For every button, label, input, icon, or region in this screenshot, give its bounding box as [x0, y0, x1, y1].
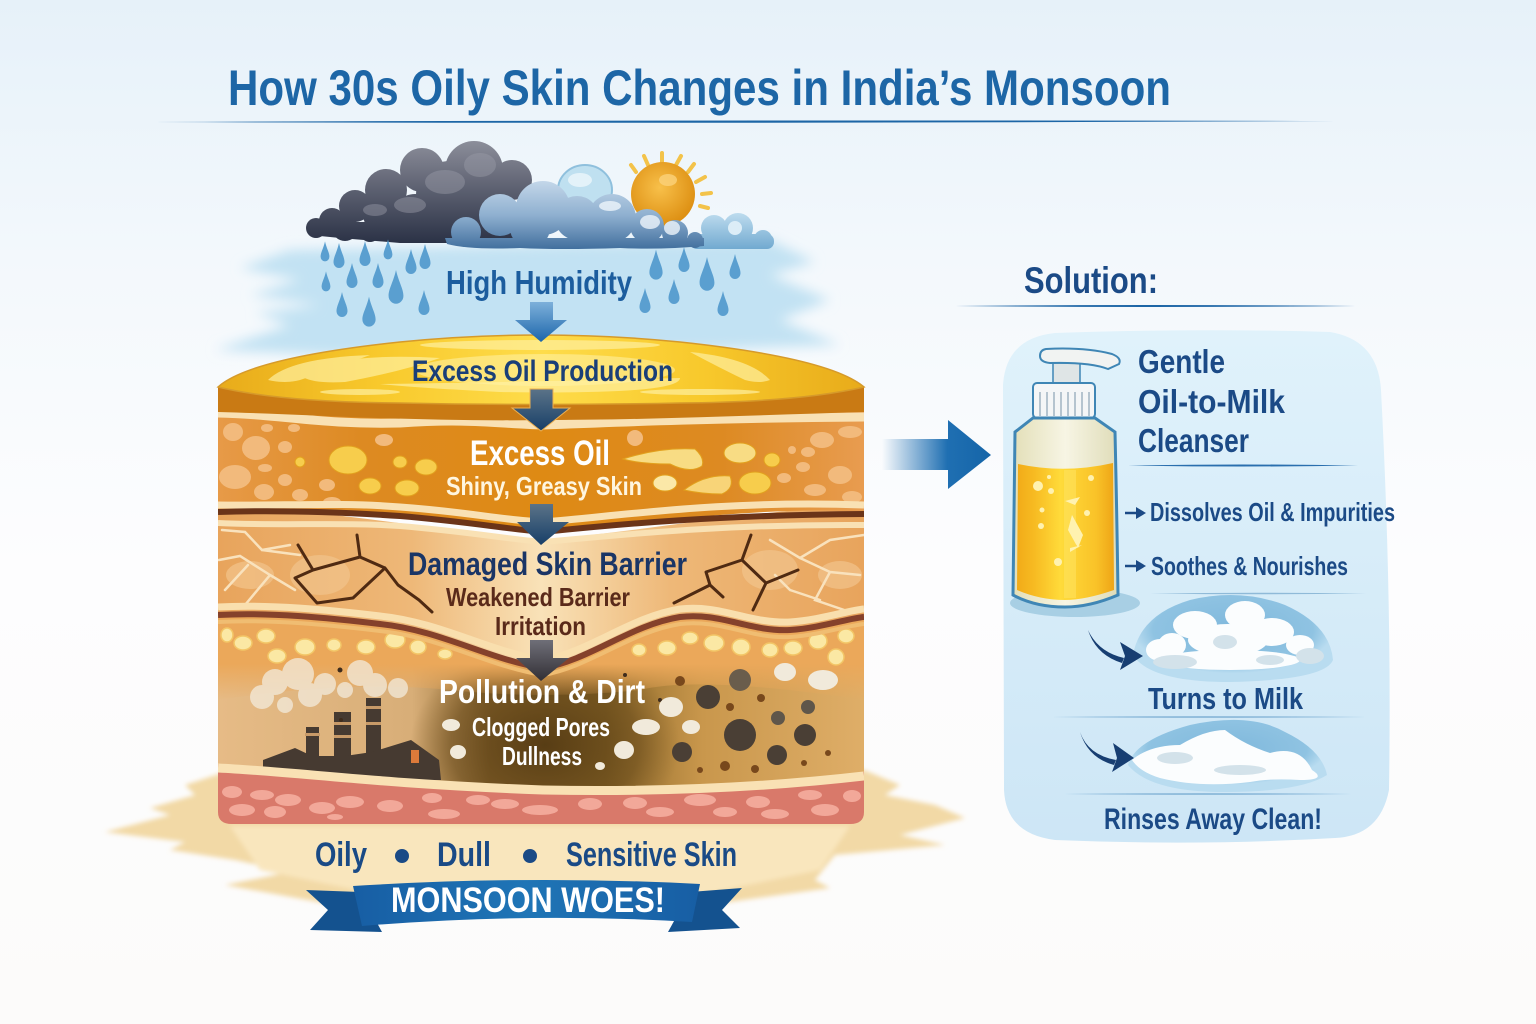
icon: smoke — [250, 658, 408, 713]
skin separators — [218, 413, 864, 790]
icon: sun — [631, 153, 711, 226]
skin layer: base pink — [218, 764, 864, 830]
icon: rain drops — [321, 239, 740, 327]
sand base — [105, 770, 965, 906]
arrow: to foam — [1088, 630, 1143, 670]
label: pollution and dirt: Dullness — [502, 741, 582, 771]
summary: skin symptoms — [315, 836, 737, 874]
summary: skin symptoms: Sensitive Skin — [566, 836, 737, 874]
heading: cleanser name: Cleanser — [1138, 422, 1249, 459]
label: damaged skin barrier: Damaged Skin Barrier — [408, 546, 687, 582]
heading: cleanser name: Oil-to-Milk — [1138, 383, 1286, 420]
banner: monsoon woes: MONSOON WOES! — [391, 881, 665, 920]
label: damaged skin barrier: Irritation — [495, 611, 586, 641]
label: damaged skin barrier — [408, 546, 687, 641]
heading: high humidity: High Humidity — [446, 264, 633, 301]
arrow: excess oil to barrier — [517, 504, 569, 545]
icon: blue cloud — [445, 181, 774, 249]
label: pollution and dirt: Clogged Pores — [472, 712, 610, 742]
icon: rinse foam — [1128, 720, 1327, 792]
title: How 30s Oily Skin Changes in India’s Monsoon — [228, 60, 1171, 116]
arrow: to solution — [882, 420, 991, 489]
label: excess oil: Shiny, Greasy Skin — [446, 471, 642, 501]
arrow: humidity to oil — [515, 302, 567, 342]
label: rinses away clean: Rinses Away Clean! — [1104, 803, 1322, 836]
panel: skin layers — [218, 335, 864, 845]
label: turns to milk: Turns to Milk — [1148, 681, 1304, 716]
heading: cleanser name: Gentle — [1138, 343, 1225, 380]
label: pollution and dirt: Pollution & Dirt — [439, 673, 645, 710]
oil pool top — [218, 335, 864, 420]
label: excess oil production: Excess Oil Production — [412, 355, 673, 388]
arrow: to rinse — [1080, 732, 1134, 772]
benefit: dissolves oil: Dissolves Oil & Impurities — [1150, 497, 1395, 527]
skin layer: excess oil band — [218, 412, 864, 527]
summary: skin symptoms: Dull — [437, 836, 491, 874]
skin layer: barrier band — [218, 505, 864, 668]
icon: factory — [263, 698, 441, 780]
label: excess oil: Excess Oil — [470, 434, 610, 473]
banner: monsoon woes — [306, 880, 742, 932]
benefit: soothes — [1125, 551, 1348, 581]
arrow: barrier to pollution — [516, 640, 569, 681]
label: damaged skin barrier: Weakened Barrier — [446, 582, 630, 612]
label: pollution and dirt — [439, 673, 645, 771]
benefit: soothes: Soothes & Nourishes — [1151, 551, 1348, 581]
icon: water bubble — [558, 165, 612, 215]
heading: cleanser name — [1138, 343, 1286, 459]
label: excess oil — [446, 434, 642, 501]
icon: foam turning to milk — [1133, 595, 1333, 682]
icon: dark storm cloud — [306, 141, 532, 243]
heading: solution: Solution: — [1024, 260, 1158, 301]
icon: dirt particles — [338, 663, 838, 773]
arrow: oil production to excess oil — [512, 389, 570, 431]
panel: solution — [1003, 330, 1395, 843]
summary: skin symptoms: Oily — [315, 836, 367, 874]
humidity mist — [215, 240, 840, 355]
skin layer: pollution band — [218, 616, 864, 786]
icon: cleanser bottle — [1010, 349, 1140, 617]
